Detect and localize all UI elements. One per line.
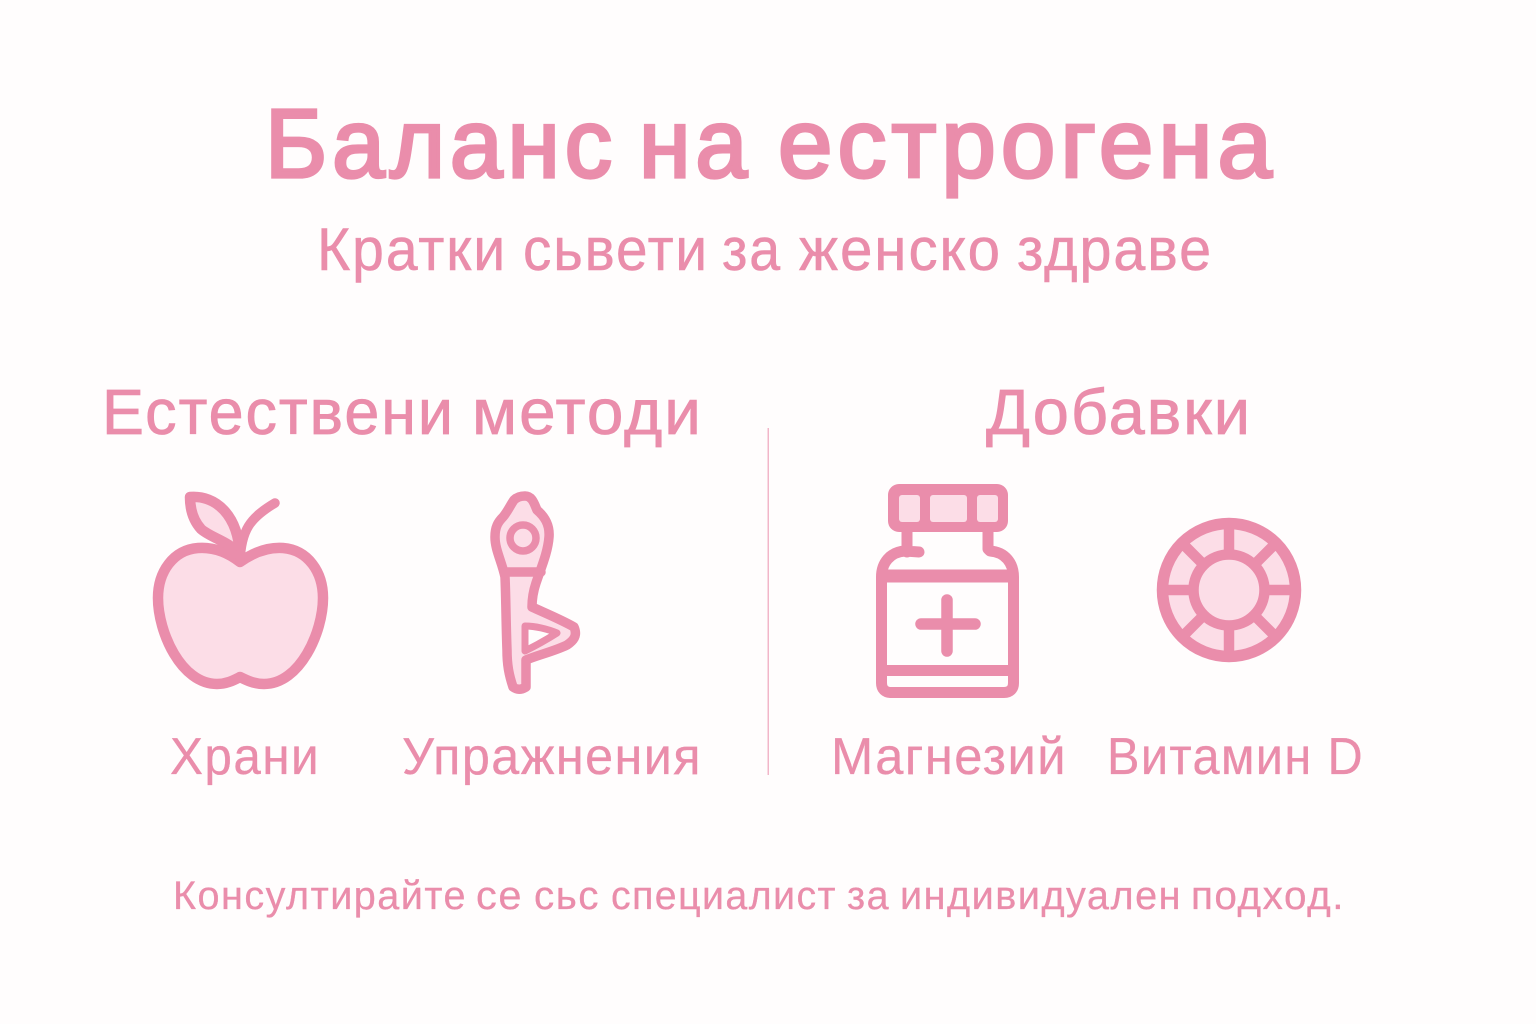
icon: apple [158, 497, 323, 684]
footer note [173, 874, 1345, 918]
heading: natural methods [102, 376, 703, 448]
heading: supplements: Добавки [986, 376, 1252, 448]
label: vitamin D: Витамин D [1107, 728, 1364, 786]
heading: natural methods: методи [472, 376, 703, 448]
title [265, 89, 1277, 198]
title: на [639, 89, 752, 198]
heading: natural methods: Естествени [102, 376, 455, 448]
divider [768, 428, 769, 775]
icon: yoga pose figure [495, 496, 575, 689]
footer note: за [847, 874, 890, 918]
title: естрогена [778, 89, 1277, 198]
footer note: индивидуален [900, 874, 1182, 918]
footer note: специалист [611, 874, 837, 918]
label: magnesium: Магнезий [831, 728, 1067, 786]
footer note: Консултирайте [173, 874, 467, 918]
bottle cap [888, 484, 1008, 532]
footer note: сьс [534, 874, 600, 918]
icon: supplement bottle [881, 484, 1014, 692]
footer note: се [476, 874, 523, 918]
subtitle [317, 216, 1213, 283]
subtitle: здраве [1017, 216, 1213, 283]
subtitle: сьвети [523, 216, 709, 283]
subtitle: Кратки [317, 216, 507, 283]
title: Баланс [265, 89, 617, 198]
icon: vitamin D sun wheel [1162, 524, 1296, 656]
bottle body [881, 532, 1014, 692]
label: foods: Храни [170, 728, 320, 786]
label: exercises: Упражнения [402, 728, 702, 786]
footer note: подход. [1191, 874, 1345, 918]
subtitle: женско [799, 216, 1002, 283]
subtitle: за [722, 216, 782, 283]
